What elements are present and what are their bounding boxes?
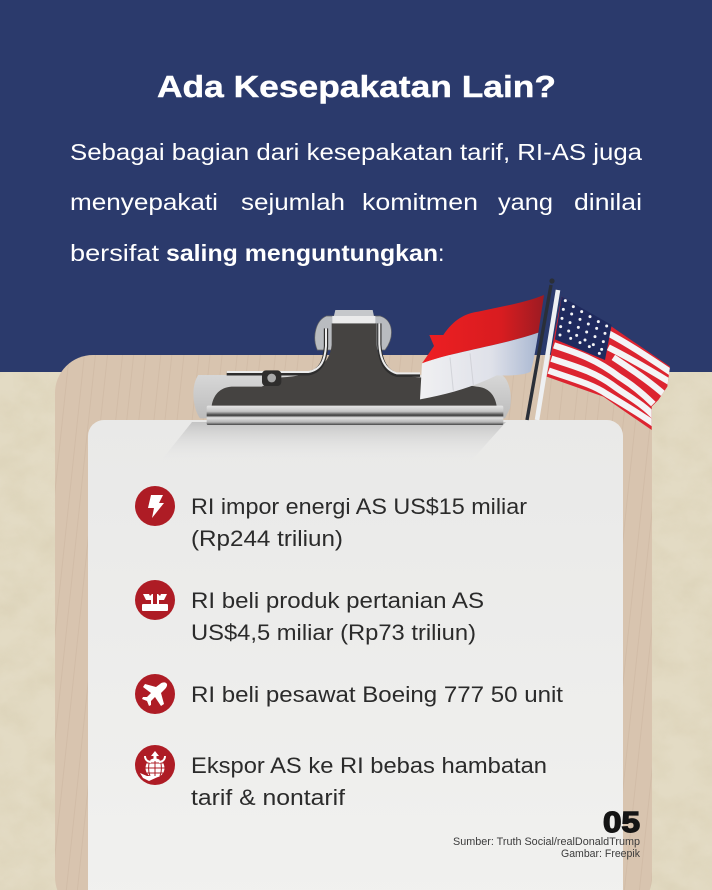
source credits: Gambar: Freepik [561, 848, 640, 860]
clip rivet [262, 370, 281, 386]
item 4 text: tarif & nontarif [191, 785, 346, 810]
intro paragraph: Sebagai bagian dari kesepakatan tarif, RI-AS juga [70, 139, 642, 165]
item 2 text: US$4,5 miliar (Rp73 triliun) [191, 620, 476, 645]
flag pole [527, 278, 558, 420]
list item 3: aircraft [135, 674, 563, 714]
intro paragraph: : [438, 240, 444, 266]
clip roller bar [207, 406, 503, 425]
intro paragraph: yang [498, 189, 553, 215]
list item 4: exports [135, 745, 547, 810]
white band folds [450, 353, 473, 391]
source credits [453, 836, 640, 860]
icon: sprouts on soil [135, 580, 175, 620]
white band [420, 333, 538, 399]
icon: globe with arrows and plane [135, 745, 175, 785]
intro paragraph: menyepakati [70, 189, 218, 215]
clipboard board [55, 355, 652, 890]
item 1 text: RI impor energi AS US$15 miliar [191, 494, 527, 519]
navy header background [0, 0, 712, 372]
parchment background [0, 372, 712, 890]
red band [422, 295, 544, 363]
white stripes [549, 333, 673, 425]
flag field [547, 297, 670, 430]
intro paragraph: dinilai [574, 189, 642, 215]
intro paragraph: sejumlah [241, 189, 345, 215]
item 4 text [191, 753, 547, 810]
page number: 05 [603, 807, 640, 839]
clip metal plate [193, 375, 511, 418]
icon: lightning bolt [135, 486, 175, 526]
icon: airplane [135, 674, 175, 714]
item 2 text [191, 588, 484, 645]
clip wire [227, 323, 420, 375]
title: Ada Kesepakatan Lain? [157, 69, 556, 104]
Indonesian flag [420, 295, 544, 399]
clip top cap [332, 310, 375, 323]
clip dark body [212, 323, 497, 406]
item 2 text: RI beli produk pertanian AS [191, 588, 484, 613]
star canton [555, 297, 612, 360]
item 4 text: Ekspor AS ke RI bebas hambatan [191, 753, 547, 778]
item 1 text [191, 494, 527, 551]
intro paragraph: komitmen [362, 189, 478, 215]
clip hinge loops [315, 316, 391, 350]
item 1 text: (Rp244 triliun) [191, 526, 343, 551]
list item 2: agriculture [135, 580, 484, 645]
intro paragraph [70, 139, 642, 266]
paper sheet [88, 420, 623, 890]
source credits: Sumber: Truth Social/realDonaldTrump [453, 836, 640, 848]
intro paragraph: saling menguntungkan [166, 240, 438, 266]
clip shadow on paper [160, 422, 506, 462]
list item 1: energy [135, 486, 527, 551]
metal clip [193, 310, 511, 425]
intro paragraph: bersifat [70, 240, 160, 266]
item 3 text: RI beli pesawat Boeing 777 50 unit [191, 682, 563, 707]
American flag [547, 297, 673, 430]
